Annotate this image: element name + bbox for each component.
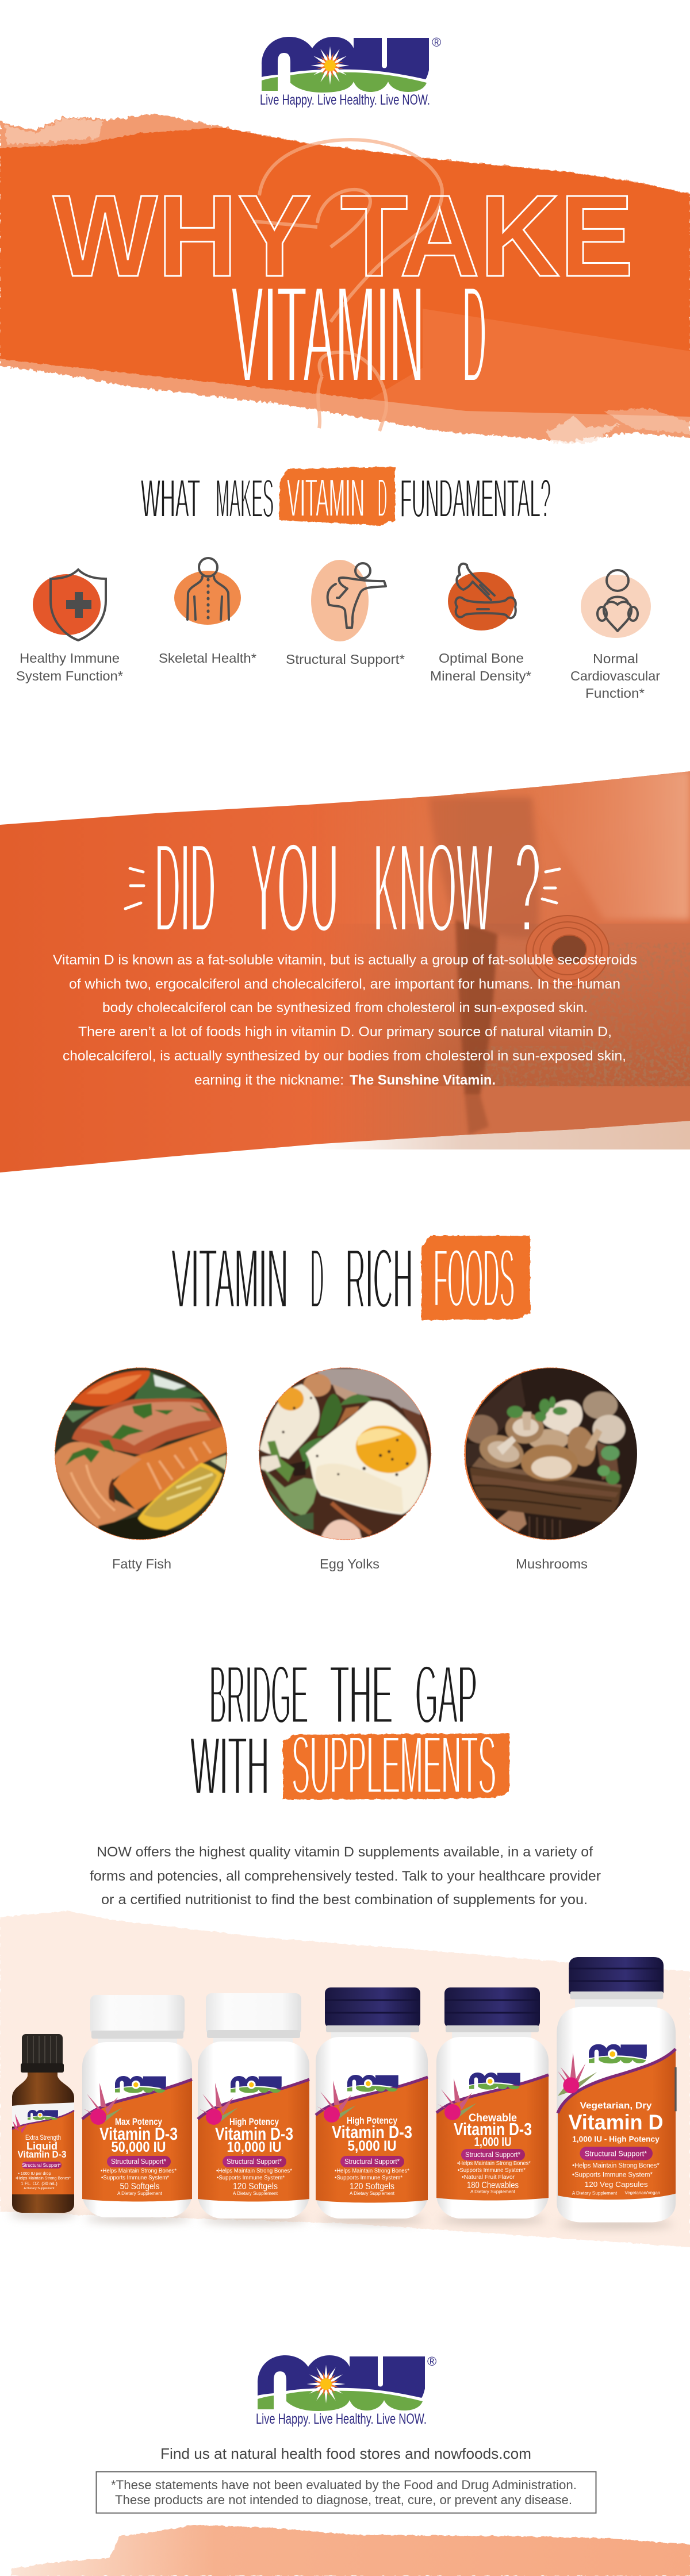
bottle: vitamin d-3 10,000 IU: 120 Softgels [233,2182,278,2191]
text: optimal bone: Mineral Density* [430,668,531,683]
NOW logo bottom: Live Happy. Live Healthy. Live NOW. [256,2411,427,2427]
icon: heart person [581,570,651,638]
disclaimer box: *These statements have not been evaluated by the Food and Drug Administration. [111,2478,577,2492]
bottle: vitamin d-3 10,000 IU [198,1993,309,2219]
bottle: liquid vitamin d-3: 1 FL. OZ. (30 mL) [21,2181,57,2186]
bottle: vitamin d-3 10,000 IU: High Potency [229,2116,279,2127]
bottle: vitamin d-3 5,000 IU: 120 Softgels [350,2182,394,2191]
icon: kicking figure [311,560,386,641]
bottle: vitamin d-3 5,000 IU [316,1987,428,2219]
bottle: vegetarian dry vitamin d: Vitamin D [568,2110,663,2134]
text: find us: Find us at natural health food stores and nowfoods.com [160,2445,531,2462]
bottle: chewable vitamin d-3 1,000 IU: Structural Support* [465,2151,520,2159]
heading: vitamin d rich foods: RICH [346,1230,413,1327]
heading: what makes vitamin d fundamental: MAKES [216,468,274,529]
heading: bridge the gap with supplements: BRIDGE [209,1648,308,1742]
icon: spine [174,558,241,625]
disclaimer box: These products are not intended to diagnose, treat, cure, or prevent any disease. [115,2493,572,2507]
text: did you know body: There aren’t a lot of foods high in vitamin D. Our primary source of natural vitamin D, [78,1024,612,1040]
text: supplements intro: or a certified nutritionist to find the best combination of supplements for you. [101,1892,588,1908]
panel: mushrooms photo [462,1365,642,1544]
panel: benefit icons [16,558,660,701]
title: did you know: YOU [250,815,339,960]
bottle: vitamin d-3 50,000 IU: 50 Softgels [120,2182,160,2191]
bottle: vitamin d-3 5,000 IU: High Potency [347,2115,397,2126]
bottle: vitamin d-3 10,000 IU: 10,000 IU [227,2139,282,2155]
heading: vitamin d rich foods: VITAMIN [171,1230,288,1327]
bottle: vegetarian dry vitamin d: Structural Support* [585,2150,647,2158]
bottle: liquid vitamin d-3: Liquid [26,2140,57,2152]
bottle: vitamin d-3 10,000 IU: Structural Support* [227,2158,282,2166]
heading: vitamin d rich foods: D [310,1230,324,1327]
heading: what makes vitamin d fundamental [141,467,551,529]
panel: egg yolks photo [256,1365,435,1544]
bottle: liquid vitamin d-3 [12,2034,74,2213]
text: structural support: Structural Support* [286,652,405,667]
bottle: liquid vitamin d-3: Vitamin D-3 [17,2149,67,2160]
panel: hero orange brush band: D [462,255,486,413]
peach background band [0,1911,690,2247]
bottle: vitamin d-3 5,000 IU: Vitamin D-3 [332,2122,412,2142]
bottle: vitamin d-3 5,000 IU: Structural Support* [344,2158,400,2166]
bottle: chewable vitamin d-3 1,000 IU: •Supports Immune System* [458,2167,526,2174]
bottle: liquid vitamin d-3: A Dietary Supplement [24,2187,55,2190]
footer brush band [11,2525,690,2576]
bottle: vegetarian dry vitamin d: A Dietary Supplement [572,2191,618,2196]
bottle: vitamin d-3 50,000 IU: Max Potency [115,2116,162,2127]
NOW logo bottom [256,2354,436,2427]
bottle: vitamin d-3 5,000 IU: A Dietary Supplement [350,2190,395,2196]
bottle: chewable vitamin d-3 1,000 IU: •Natural Fruit Flavor [462,2174,515,2181]
bottle: vegetarian dry vitamin d: 1,000 IU - High Potency [572,2135,660,2144]
text: healthy immune: Healthy Immune [20,651,120,666]
bottle: vitamin d-3 50,000 IU: 50,000 IU [112,2139,166,2155]
text: supplements intro [90,1844,601,1908]
bottle: vitamin d-3 5,000 IU: •Helps Maintain Strong Bones* [335,2167,409,2174]
panel: product bottles [10,1957,677,2228]
text: did you know body: The Sunshine Vitamin. [350,1072,496,1088]
bottle: liquid vitamin d-3: Structural Support* [22,2163,61,2168]
bottle: vitamin d-3 10,000 IU: A Dietary Supplement [233,2190,278,2196]
panel: hero orange brush band [0,114,690,443]
text: food labels: Egg Yolks [320,1556,379,1571]
bottle: liquid vitamin d-3: Extra Strength [25,2135,61,2141]
bottle: vegetarian dry vitamin d: •Helps Maintain Strong Bones* [572,2162,660,2170]
bottle: vitamin d-3 10,000 IU: •Helps Maintain Strong Bones* [216,2167,292,2174]
icon: bones [448,564,516,630]
text: did you know body: of which two, ergocalciferol and cholecalciferol, are important for humans. In the human [69,976,620,992]
text: did you know body: cholecalciferol, is actually synthesized by our bodies from cholesterol in sun-exposed skin, [63,1048,626,1064]
title: did you know: DID [155,815,216,960]
panel: did you know [0,770,690,1172]
bottle: vegetarian dry vitamin d [557,1957,677,2223]
heading: what makes vitamin d fundamental: WHAT [141,468,200,529]
text: supplements intro: NOW offers the highest quality vitamin D supplements available, in a variety of [97,1844,593,1860]
heading: what makes vitamin d fundamental: VITAMIN [287,467,365,529]
text: did you know body: Vitamin D is known as a fat-soluble vitamin, but is actually a group of fat-soluble secosteroids [53,952,637,968]
heading: bridge the gap with supplements: THE [330,1648,393,1742]
icon: faint question mark [253,140,442,431]
text: optimal bone: Optimal Bone [439,651,524,666]
text: skeletal health: Skeletal Health* [159,651,256,666]
text: food labels: Fatty Fish [112,1556,171,1571]
heading: bridge the gap with supplements: GAP [415,1648,477,1742]
bottle: chewable vitamin d-3 1,000 IU: 1,000 IU [474,2135,512,2149]
bottle: chewable vitamin d-3 1,000 IU: 180 Chewables [467,2181,519,2190]
bottle: vitamin d-3 50,000 IU [82,1995,192,2217]
bottle: vegetarian dry vitamin d: Vegetarian/Vegan [624,2190,660,2196]
bottle: vegetarian dry vitamin d: 120 Veg Capsules [585,2181,648,2189]
text: cardiovascular: Function* [585,686,645,701]
bottle: vitamin d-3 50,000 IU: •Supports Immune System* [101,2174,169,2181]
title: why take: WHY TAKE [53,171,634,301]
text: cardiovascular [570,651,660,701]
panel: did you know: ? [515,815,540,960]
text: food labels [112,1556,588,1571]
bottle: vitamin d-3 5,000 IU: •Supports Immune System* [335,2174,402,2181]
bottle: vitamin d-3 50,000 IU: •Helps Maintain Strong Bones* [101,2167,177,2174]
bottle: liquid vitamin d-3: •Helps Maintain Strong Bones* [16,2177,71,2181]
bottle: chewable vitamin d-3 1,000 IU [436,1987,549,2219]
beach photo [337,771,690,1143]
bottle: liquid vitamin d-3: • 1000 IU per drop [18,2172,51,2176]
text: did you know body: body cholecalciferol can be synthesized from cholesterol in sun-exposed skin. [102,1000,588,1016]
bottle: chewable vitamin d-3 1,000 IU: •Helps Maintain Strong Bones* [457,2160,531,2167]
bottle: vitamin d-3 50,000 IU: A Dietary Supplement [117,2190,163,2196]
heading: bridge the gap with supplements [190,1648,509,1813]
icon: emphasis rays [125,868,559,909]
bottle: chewable vitamin d-3 1,000 IU: Vitamin D-3 [454,2119,532,2139]
bottle: vitamin d-3 10,000 IU: Vitamin D-3 [215,2124,293,2144]
title: vitamin d [231,255,486,413]
text: healthy immune: System Function* [16,668,123,683]
text: food labels: Mushrooms [516,1556,588,1571]
disclaimer box [97,2471,596,2513]
bottle: vegetarian dry vitamin d: •Supports Immune System* [572,2170,653,2178]
icon: shield [33,570,106,640]
text: cardiovascular: Cardiovascular [570,668,660,683]
NOW logo bottom: ® [427,2354,436,2369]
text: did you know body [53,952,637,1088]
bottle: vitamin d-3 5,000 IU: 5,000 IU [347,2138,397,2154]
text: supplements intro: forms and potencies, all comprehensively tested. Talk to your healthcare provider [90,1868,601,1884]
text: optimal bone [430,651,531,683]
text: did you know body: earning it the nickname: [194,1072,344,1088]
bottle: vitamin d-3 10,000 IU: •Supports Immune System* [217,2174,285,2181]
bottle: vitamin d-3 50,000 IU: Structural Support* [111,2158,166,2166]
text: healthy immune [16,651,123,683]
bottle: vitamin d-3 50,000 IU: Vitamin D-3 [99,2124,178,2144]
bottle shadows [10,2210,673,2228]
NOW logo top [260,35,441,108]
bottle: chewable vitamin d-3 1,000 IU: Chewable [469,2112,517,2124]
panel: fatty fish photo [52,1365,231,1544]
heading: bridge the gap with supplements: WITH [190,1719,269,1813]
NOW logo top: ® [432,35,441,49]
heading: what makes vitamin d fundamental: D [378,467,387,529]
text: cardiovascular: Normal [593,651,638,666]
bottle: chewable vitamin d-3 1,000 IU: A Dietary Supplement [470,2189,516,2194]
NOW logo top: Live Happy. Live Healthy. Live NOW. [260,92,430,108]
bottle: vegetarian dry vitamin d: Vegetarian, Dry [580,2101,652,2110]
